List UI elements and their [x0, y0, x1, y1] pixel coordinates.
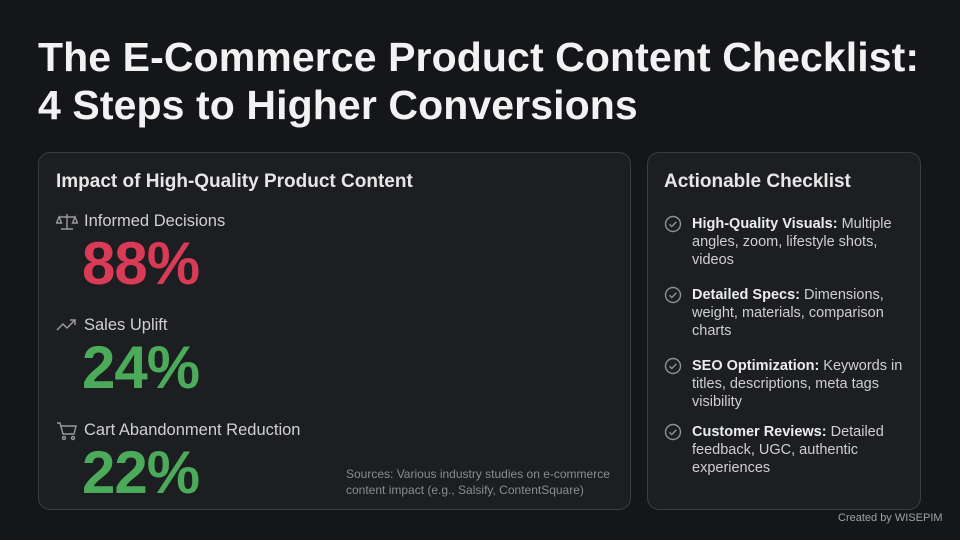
title: [38, 34, 919, 128]
icon: cart: [57, 422, 77, 440]
stat 24%: 24%: [82, 334, 199, 401]
icon: scale: [56, 214, 78, 230]
credit: Created by WISEPIM: [838, 512, 943, 524]
item 1: High-Quality Visuals: Multiple angles, zoom, lifestyle shots, videos: [692, 216, 892, 268]
title: 4 Steps to Higher Conversions: [38, 82, 638, 128]
label: sales uplift: Sales Uplift: [84, 316, 167, 334]
sources note: content impact (e.g., Salsify, ContentSquare): [346, 483, 584, 497]
impact heading: Impact of High-Quality Product Content: [56, 171, 413, 192]
stat 22%: 22%: [82, 439, 199, 506]
title: The E-Commerce Product Content Checklist:: [38, 34, 919, 80]
item 4: Customer Reviews: Detailed feedback, UGC, authentic experiences: [692, 424, 884, 476]
label: informed decisions: Informed Decisions: [84, 212, 225, 230]
sources note: [346, 467, 610, 497]
item 3: SEO Optimization: Keywords in titles, descriptions, meta tags visibility: [692, 358, 902, 410]
sources note: Sources: Various industry studies on e-commerce: [346, 467, 610, 481]
icon: trend: [56, 319, 76, 330]
panel: checklist: [647, 152, 921, 510]
panel: impact: [38, 152, 631, 510]
item 2: Detailed Specs: Dimensions, weight, materials, comparison charts: [692, 287, 884, 339]
label: cart abandonment: Cart Abandonment Reduction: [84, 421, 300, 439]
checklist heading: Actionable Checklist: [664, 171, 851, 192]
stat 88%: 88%: [82, 230, 199, 297]
